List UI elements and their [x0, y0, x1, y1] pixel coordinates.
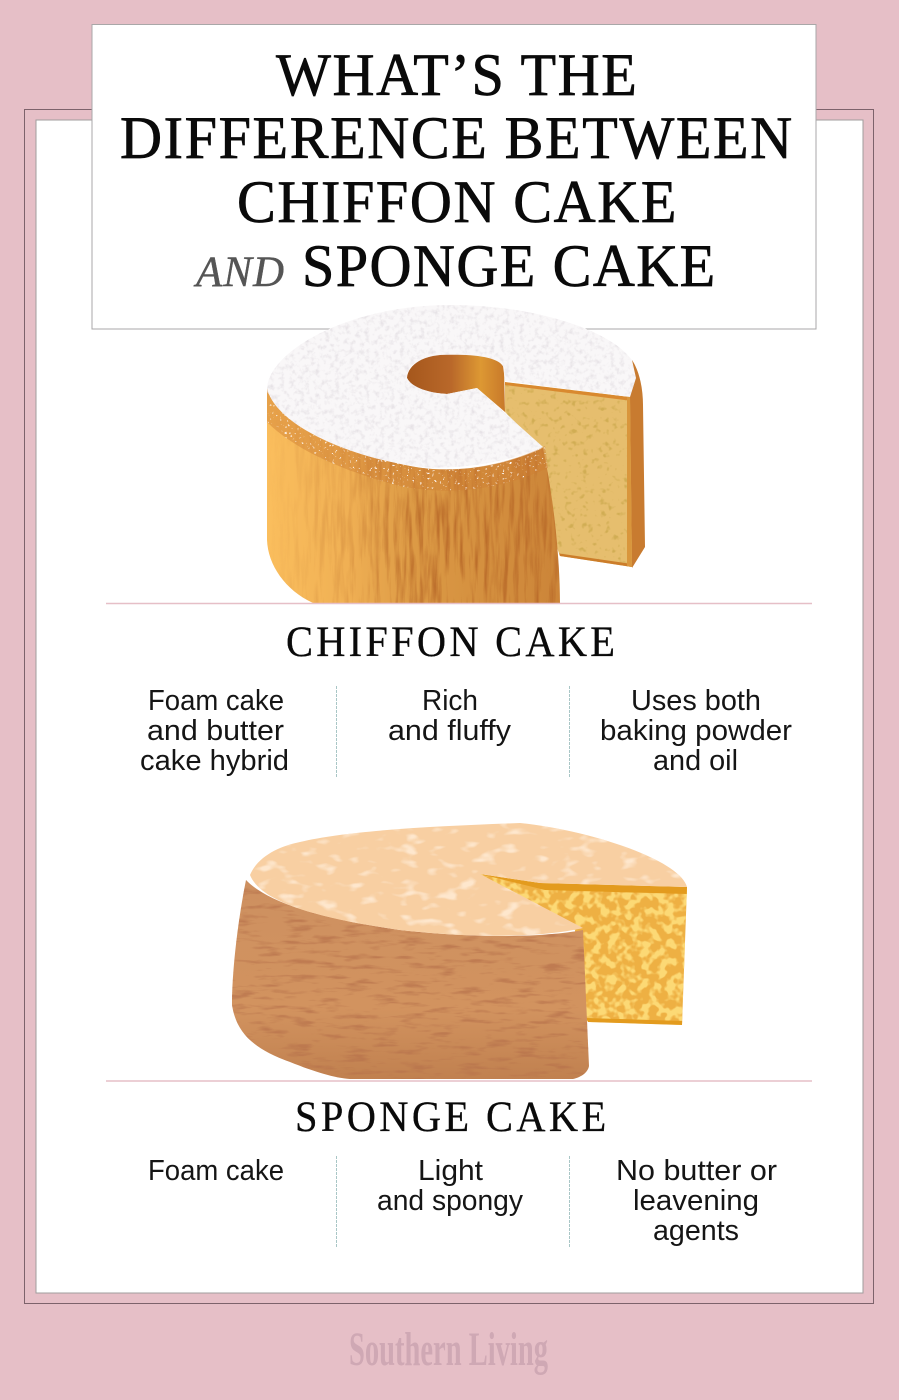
fact: foam and butter hybrid: Foam cake [148, 685, 284, 717]
top crust [245, 820, 690, 942]
fact: foam and butter hybrid [140, 685, 289, 777]
fact: foam and butter hybrid: cake hybrid [140, 745, 289, 777]
fact: rich and fluffy: and fluffy [388, 715, 512, 747]
fact: baking powder and oil [600, 685, 793, 777]
outer side wall [228, 875, 592, 1081]
illustration: sponge cake [228, 820, 690, 1081]
heading: chiffon cake: CHIFFON CAKE [286, 619, 615, 666]
outer crust on the far right [626, 360, 645, 568]
fact: baking powder and oil: and oil [653, 745, 738, 777]
sponge cake facts [148, 1155, 778, 1248]
fact: no butter or leavening: agents [653, 1215, 739, 1247]
powdered sugar top [262, 300, 642, 475]
title panel: SPONGE CAKE [302, 232, 715, 299]
divider [106, 1080, 812, 1082]
fact: no butter or leavening [616, 1155, 778, 1247]
fact: foam cake: Foam cake [148, 1155, 284, 1187]
title panel: CHIFFON CAKE [237, 168, 676, 235]
title panel: AND [193, 249, 284, 296]
divider [106, 602, 812, 604]
heading: sponge cake: SPONGE CAKE [295, 1094, 606, 1141]
title panel [92, 24, 816, 329]
logo: Southern Living: Southern Living [349, 1323, 548, 1376]
rim crust with sugar specks [267, 388, 548, 490]
white content panel [36, 120, 863, 1293]
fact: foam and butter hybrid: and butter [147, 715, 285, 747]
title panel: WHAT’S THE [276, 41, 637, 108]
hole interior [407, 353, 505, 412]
cut interior face [505, 382, 632, 567]
fact: rich and fluffy [388, 685, 512, 747]
fact: rich and fluffy: Rich [422, 685, 478, 717]
illustration: chiffon cake [262, 300, 645, 605]
fact: light and spongy: and spongy [377, 1185, 524, 1217]
fact: baking powder and oil: baking powder [600, 715, 793, 747]
fact: no butter or leavening: leavening [633, 1185, 759, 1217]
title panel: DIFFERENCE BETWEEN [120, 104, 792, 171]
chiffon cake facts [140, 685, 793, 778]
fact: light and spongy [377, 1155, 524, 1217]
cut interior face [478, 870, 690, 1030]
outer side wall [262, 385, 564, 605]
fact: light and spongy: Light [418, 1155, 483, 1187]
fact: no butter or leavening: No butter or [616, 1155, 778, 1187]
fact: baking powder and oil: Uses both [631, 685, 761, 717]
